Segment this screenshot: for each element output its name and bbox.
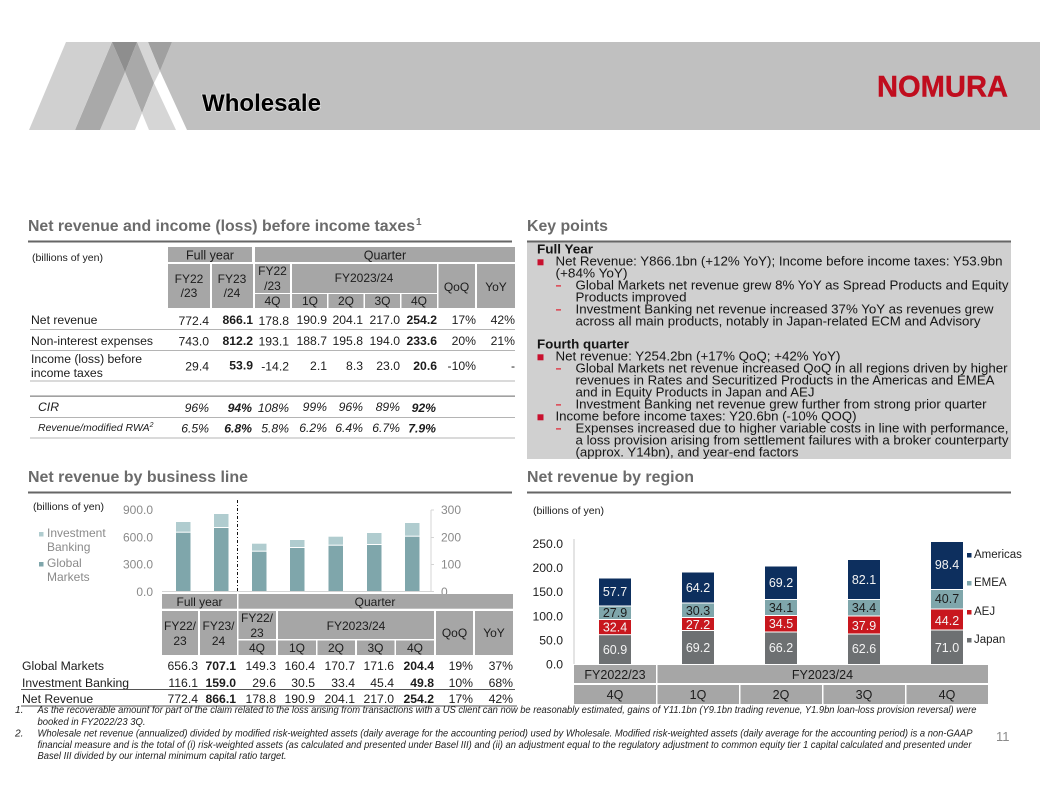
row: net revenue total: 772.4 — [168, 692, 198, 706]
row: global markets — [22, 659, 513, 673]
axis: 50.0 — [539, 634, 563, 648]
fourth quarter block: Income before income taxes: Y20.6bn (-10% QOQ) — [556, 408, 856, 424]
panel: income table — [30, 247, 515, 438]
table header: QoQ — [442, 626, 467, 640]
axes — [162, 510, 434, 592]
stacked bars — [176, 514, 420, 591]
bar: FY2023/24 3Q: 34.4 — [852, 601, 876, 615]
fourth quarter block: (approx. Y14bn), and year-end factors — [576, 444, 799, 460]
category table: 1Q — [690, 688, 707, 702]
row: net revenue total: 217.0 — [364, 692, 394, 706]
right axis labels: 100 — [441, 558, 461, 572]
row: net revenue: 254.2 — [406, 313, 437, 327]
table header: 23 — [250, 626, 264, 640]
bar: FY2023/24 4Q: 71.0 — [935, 641, 959, 655]
row: income before taxes: 29.4 — [185, 360, 209, 374]
row: CIR: 96% — [185, 401, 209, 415]
footnotes: Basel III divided by our internal minimum capital ratio target. — [38, 751, 286, 762]
full year block: Full Year — [537, 242, 593, 256]
row: global markets: 656.3 — [168, 659, 198, 673]
row: net revenue: 204.1 — [332, 313, 363, 327]
bar: FY2023/24 4Q: 44.2 — [935, 614, 959, 628]
row: net revenue: 772.4 — [178, 314, 209, 328]
bar: FY2023/24 3Q — [848, 560, 880, 664]
category table: FY2023/24 — [792, 668, 853, 682]
fourth quarter block: Global Markets net revenue increased QoQ in all regions driven by higher — [576, 360, 1008, 376]
bar: FY2023/24 1Q: 30.3 — [686, 604, 710, 618]
row: revenue / modified RWA: 6.7% — [372, 421, 400, 435]
row: CIR: CIR — [38, 400, 59, 414]
bar: FY2023/24 1Q: 69.2 — [686, 641, 710, 655]
axis — [532, 537, 574, 672]
fourth quarter block: revenues in Rates and Securitized Products in the Americas and EMEA — [576, 372, 995, 388]
row: income before taxes: 2.1 — [310, 359, 327, 373]
row: CIR: 96% — [339, 400, 363, 414]
category table: 4Q — [607, 688, 624, 702]
legend: Markets — [47, 570, 90, 584]
heading: key points: Key points — [527, 218, 608, 235]
row: net revenue total — [22, 692, 513, 706]
row: net revenue: 866.1 — [222, 313, 253, 327]
row: global markets: 19% — [449, 659, 473, 673]
row: revenue / modified RWA: 6.2% — [299, 421, 327, 435]
bar: FY2023/24 2Q: 66.2 — [769, 641, 793, 655]
bar: FY2023/24 4Q: 98.4 — [935, 558, 959, 572]
row: revenue / modified RWA: 2 — [149, 422, 154, 429]
table header: Full year — [176, 595, 223, 609]
panel: business line table — [21, 594, 517, 706]
row: non-interest expenses: 20% — [452, 334, 476, 348]
axis: 0.0 — [546, 658, 563, 672]
row: income before taxes: 20.6 — [413, 359, 437, 373]
table header: 4Q — [264, 294, 281, 308]
axis: 250.0 — [532, 537, 563, 551]
table header: 1Q — [302, 294, 318, 308]
row: global markets: 149.3 — [246, 659, 276, 673]
bar: FY2023/24 2Q: 34.1 — [769, 601, 793, 615]
chart: net revenue by business line — [33, 500, 461, 599]
bar: FY2023/24 3Q: 62.6 — [852, 642, 876, 656]
row: net revenue total: 866.1 — [206, 692, 236, 706]
category table: FY2022/23 — [584, 668, 646, 682]
table header: 1Q — [289, 641, 305, 655]
row: CIR: 99% — [303, 400, 327, 414]
row: non-interest expenses: Non-interest expenses — [31, 334, 153, 348]
legend: EMEA — [974, 577, 1007, 589]
bar: FY2022/23 4Q — [599, 578, 631, 664]
heading: net revenue by region: Net revenue by region — [527, 469, 694, 486]
legend: Investment — [47, 526, 106, 540]
footnotes: Wholesale net revenue (annualized) divided by modified risk-weighted assets (daily average for the accounting period) used by Wholesale. Modified risk-weighted assets (daily average for the accounting period) is a non-GAAP — [38, 728, 973, 740]
row: non-interest expenses: 21% — [491, 334, 515, 348]
footnotes: 2. — [14, 728, 24, 740]
table header: FY22/ — [241, 611, 274, 625]
table header: 2Q — [328, 641, 344, 655]
heading: net revenue and income — [28, 217, 512, 242]
row: net revenue: Net revenue — [31, 313, 98, 327]
table header: FY2023/24 — [335, 271, 394, 285]
row: income before taxes: -10% — [448, 359, 476, 373]
row: income before taxes: - — [511, 359, 515, 373]
right axis labels: 0 — [441, 585, 448, 599]
row: net revenue: 217.0 — [370, 313, 400, 327]
row: investment banking: 68% — [489, 676, 513, 690]
row: non-interest expenses: 193.1 — [258, 334, 289, 348]
bar: FY2023/24 3Q: 82.1 — [852, 573, 876, 587]
bar: FY2022/23 4Q: 60.9 — [603, 643, 627, 657]
row: global markets: 204.4 — [404, 659, 434, 673]
row: net revenue: 17% — [452, 313, 476, 327]
row: net revenue total: 204.1 — [324, 692, 355, 706]
table header: 4Q — [407, 641, 423, 655]
category table: 3Q — [856, 688, 873, 702]
left axis labels — [123, 503, 153, 599]
row: investment banking: 49.8 — [410, 676, 434, 690]
table header: FY22/ — [164, 619, 197, 633]
full year block: across all main products, notably in Japan-related ECM and Advisory — [576, 314, 981, 328]
chart unit note: (billions of yen) — [33, 502, 104, 513]
row: income before taxes — [31, 352, 515, 380]
row: global markets: 170.7 — [324, 659, 355, 673]
table header — [162, 594, 513, 655]
footnotes: booked in FY2022/23 3Q. — [38, 717, 146, 728]
legend: AEJ — [974, 606, 995, 618]
row: global markets: Global Markets — [22, 659, 104, 673]
full year block: Net Revenue: Y866.1bn (+12% YoY); Income before income taxes: Y53.9bn — [556, 254, 1002, 268]
row: income before taxes: income taxes — [31, 366, 103, 380]
row: non-interest expenses — [31, 334, 515, 348]
row: investment banking: 116.1 — [168, 676, 198, 690]
left axis labels: 300.0 — [123, 558, 153, 572]
legend: Banking — [47, 540, 90, 554]
fourth quarter block: Investment Banking net revenue grew further from strong prior quarter — [576, 396, 987, 412]
full year block: Products improved — [576, 290, 686, 304]
row: revenue / modified RWA: Revenue/modified RWA — [38, 422, 150, 434]
divider line — [236, 500, 238, 592]
table header: /23 — [181, 286, 198, 300]
footnotes: As the recoverable amount for part of the claim related to the loss arising from transactions with a US client can now be reasonably estimated, gains of Y11.1bn (Y9.1bn trading revenue, Y1.9bn loan-loss provision reversal) were — [37, 705, 977, 716]
row: non-interest expenses: 812.2 — [222, 334, 253, 348]
fourth quarter block — [537, 336, 1009, 460]
row: non-interest expenses: 743.0 — [178, 334, 209, 348]
row: CIR: 94% — [228, 401, 252, 415]
row: revenue / modified RWA: 5.8% — [261, 422, 289, 436]
category table: 4Q — [939, 688, 956, 702]
row: net revenue total: 42% — [489, 692, 513, 706]
table header: 4Q — [249, 641, 265, 655]
row: investment banking: 29.6 — [252, 676, 276, 690]
row: net revenue — [31, 313, 515, 328]
category table — [574, 665, 988, 704]
right axis labels: 200 — [441, 530, 461, 544]
row: net revenue total: 17% — [449, 692, 473, 706]
table header: FY22 — [258, 264, 287, 278]
axis: 150.0 — [532, 585, 563, 599]
row: CIR — [38, 400, 436, 415]
row: income before taxes: Income (loss) before — [31, 352, 142, 366]
row: revenue / modified RWA — [38, 421, 436, 436]
bar: FY2022/23 4Q: 27.9 — [603, 606, 627, 620]
row: net revenue total: 190.9 — [284, 692, 315, 706]
fourth quarter block: Expenses increased due to higher variable costs in line with performance, — [576, 420, 1008, 436]
row: investment banking: 33.4 — [331, 676, 355, 690]
right axis labels — [441, 503, 461, 599]
row: revenue / modified RWA: 6.8% — [224, 422, 252, 436]
table header: Full year — [186, 248, 234, 262]
legend: Global — [47, 556, 82, 570]
row: income before taxes: -14.2 — [261, 360, 289, 374]
row: CIR: 108% — [258, 401, 289, 415]
row: CIR: 89% — [376, 400, 400, 414]
full year block: Investment Banking net revenue increased 37% YoY as revenues grew — [576, 302, 994, 316]
table header: FY2023/24 — [327, 619, 386, 633]
table header: YoY — [483, 626, 505, 640]
table header: 4Q — [411, 294, 427, 308]
legend — [967, 549, 1022, 646]
table header: 24 — [212, 634, 225, 648]
bar: FY2023/24 1Q — [682, 572, 714, 664]
row: global markets: 171.6 — [364, 659, 394, 673]
row lines — [30, 329, 515, 438]
legend: Japan — [974, 634, 1005, 646]
left axis labels: 900.0 — [123, 503, 153, 517]
full year block: Global Markets net revenue grew 8% YoY as Spread Products and Equity — [576, 278, 1009, 292]
table header: 23 — [173, 634, 187, 648]
row: revenue / modified RWA: 7.9% — [408, 422, 436, 436]
footnotes: 1. — [15, 705, 24, 716]
footnotes — [14, 705, 977, 762]
table header: Quarter — [364, 248, 406, 262]
table header: FY23 — [218, 272, 247, 286]
axis: 200.0 — [532, 561, 563, 575]
category table: 2Q — [773, 688, 790, 702]
full year block — [537, 242, 1009, 328]
left axis labels: 600.0 — [123, 530, 153, 544]
bar: FY2023/24 1Q: 64.2 — [686, 581, 710, 595]
bar: FY2023/24 2Q — [765, 566, 797, 664]
row: net revenue total: Net Revenue — [22, 692, 93, 706]
bar: FY2022/23 4Q: 57.7 — [603, 585, 627, 599]
full year block: (+84% YoY) — [556, 266, 628, 280]
row: investment banking — [22, 676, 513, 690]
table header: FY22 — [175, 272, 204, 286]
bar: FY2023/24 1Q: 27.2 — [686, 618, 710, 632]
bar: FY2023/24 4Q: 40.7 — [935, 592, 959, 606]
bar: FY2023/24 2Q: 34.5 — [769, 617, 793, 631]
row: investment banking: 45.4 — [370, 676, 394, 690]
row: net revenue: 178.8 — [258, 314, 289, 328]
table header: /24 — [224, 286, 241, 300]
panel: key points — [527, 240, 1011, 460]
table header: FY23/ — [202, 619, 235, 633]
row: non-interest expenses: 233.6 — [406, 334, 437, 348]
axis: 100.0 — [532, 610, 563, 624]
legend — [39, 526, 106, 584]
heading: net revenue and income: Net revenue and income (loss) before income taxes — [28, 218, 415, 235]
row: investment banking: 159.0 — [206, 676, 236, 690]
row: net revenue: 190.9 — [296, 313, 327, 327]
bar: FY2023/24 3Q: 37.9 — [852, 619, 876, 633]
table header: 2Q — [338, 294, 354, 308]
table header: YoY — [485, 280, 507, 294]
row: revenue / modified RWA: 6.4% — [335, 421, 363, 435]
row: global markets: 37% — [489, 659, 513, 673]
chart unit note: (billions of yen) — [533, 506, 604, 517]
left axis labels: 0.0 — [136, 585, 153, 599]
legend: Americas — [974, 549, 1022, 561]
row: non-interest expenses: 188.7 — [296, 334, 327, 348]
row: non-interest expenses: 194.0 — [370, 334, 400, 348]
row: income before taxes: 23.0 — [376, 359, 400, 373]
row: net revenue total: 178.8 — [246, 692, 276, 706]
table header: /23 — [264, 279, 281, 293]
heading: net revenue by business line: Net revenue by business line — [28, 469, 248, 486]
row: investment banking: 10% — [449, 676, 473, 690]
row: investment banking: Investment Banking — [22, 676, 129, 690]
header band — [29, 42, 1040, 130]
table unit note: (billions of yen) — [32, 253, 103, 264]
row: global markets: 707.1 — [206, 659, 236, 673]
row: net revenue total: 254.2 — [404, 692, 434, 706]
row: non-interest expenses: 195.8 — [332, 334, 363, 348]
fourth quarter block: and in Equity Products in Japan and AEJ — [576, 384, 814, 400]
right axis labels: 300 — [441, 503, 461, 517]
table header: 3Q — [367, 641, 384, 655]
table header: 3Q — [374, 294, 391, 308]
fourth quarter block: Fourth quarter — [537, 336, 629, 352]
row: net revenue: 42% — [491, 313, 515, 327]
bar: FY2023/24 4Q — [931, 542, 963, 664]
page number: 11 — [996, 729, 1010, 744]
table header: QoQ — [444, 280, 469, 294]
table header: Quarter — [355, 595, 395, 609]
row: investment banking: 30.5 — [291, 676, 315, 690]
table header — [168, 247, 515, 308]
bar: FY2023/24 2Q: 69.2 — [769, 576, 793, 590]
fourth quarter block: a loss provision arising from settlement failures with a broker counterparty — [576, 432, 1009, 448]
footnotes: financial measure and is the total of (i) risk-weighted assets (as calculated and presented under Basel III) and (ii) an adjustment equal to the regulatory adjustment to common equity tier 1 capital calculated and presented under — [38, 740, 972, 751]
fourth quarter block: Net revenue: Y254.2bn (+17% QoQ; +42% YoY) — [556, 348, 840, 364]
title: Wholesale — [202, 90, 321, 117]
logo: Nomura: NOMURA — [877, 71, 1008, 104]
row: income before taxes: 8.3 — [346, 359, 363, 373]
chart: net revenue by region — [532, 506, 1022, 704]
row: revenue / modified RWA: 6.5% — [181, 422, 209, 436]
row: CIR: 92% — [412, 401, 436, 415]
bar: FY2022/23 4Q: 32.4 — [603, 620, 627, 634]
row: income before taxes: 53.9 — [229, 358, 253, 372]
row: global markets: 160.4 — [284, 659, 315, 673]
heading: net revenue and income: 1 — [416, 217, 422, 228]
